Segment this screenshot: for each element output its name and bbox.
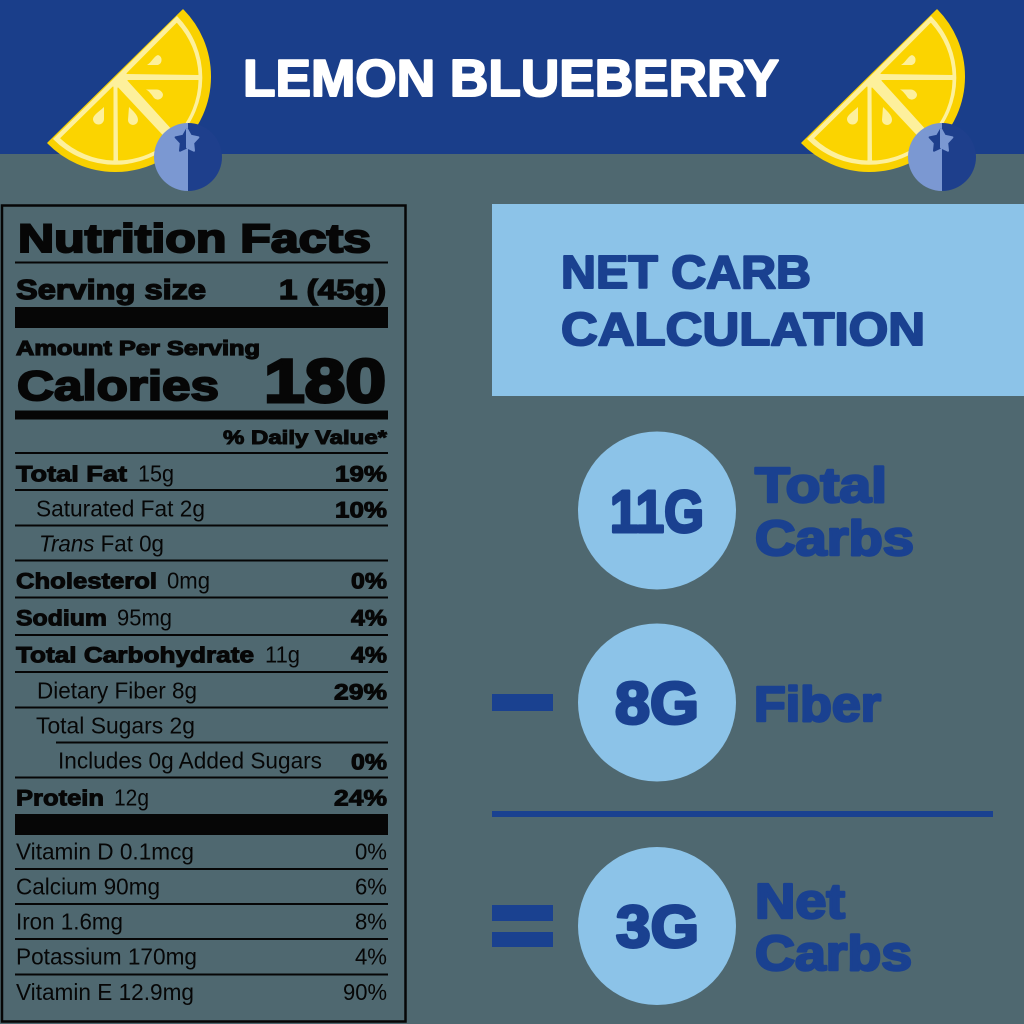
circle: total carbs value: 11G xyxy=(610,479,704,545)
title: LEMON BLUEBERRY xyxy=(243,50,779,108)
header band xyxy=(0,0,1024,154)
calories row: Calories xyxy=(17,362,219,409)
serving size row xyxy=(16,274,386,305)
row: saturated fat: 10% xyxy=(335,498,387,522)
row: dietary fiber: 29% xyxy=(334,680,387,704)
circle: total carbs value xyxy=(578,432,736,590)
circle: fiber value xyxy=(578,624,736,782)
row: calcium xyxy=(16,874,387,900)
row: total carbohydrate: 4% xyxy=(351,642,387,668)
row: iron xyxy=(16,908,387,934)
row: added sugars: Includes 0g Added Sugars xyxy=(58,748,322,774)
row: trans fat: Trans Fat 0g xyxy=(39,530,164,556)
row: vitamin d: 0% xyxy=(355,838,387,864)
sum line xyxy=(492,811,993,817)
row: cholesterol: 0% xyxy=(351,568,387,594)
amount per serving: Amount Per Serving xyxy=(16,337,260,360)
icon: lemon slice and blueberry, right xyxy=(802,10,976,191)
row: sodium xyxy=(16,604,387,630)
label: total carbs xyxy=(755,459,914,566)
serving size row: 1 (45g) xyxy=(279,274,386,305)
row: total fat: 19% xyxy=(335,462,387,486)
row: saturated fat: Saturated Fat 2g xyxy=(36,496,205,522)
row: iron: 8% xyxy=(355,908,387,934)
row: calcium: Calcium 90mg xyxy=(16,874,160,900)
row: total fat: 15g xyxy=(138,460,174,486)
row: total carbohydrate: 11g xyxy=(265,642,300,668)
calories row: 180 xyxy=(264,347,386,415)
row: sodium: Sodium xyxy=(16,606,107,630)
row: sodium: 95mg xyxy=(117,604,172,630)
row: potassium: Potassium 170mg xyxy=(16,944,197,970)
circle: net carbs value xyxy=(578,847,736,1005)
nutrition heading: Nutrition Facts xyxy=(18,217,371,261)
row: protein xyxy=(16,784,387,810)
row: total fat: Total Fat xyxy=(16,462,128,486)
icon: lemon slice and blueberry, left xyxy=(48,10,222,191)
row: cholesterol: 0mg xyxy=(167,568,210,594)
label: net carbs xyxy=(755,875,912,981)
label: total carbs: Total xyxy=(755,459,887,513)
row: dietary fiber xyxy=(37,678,387,704)
calories row xyxy=(17,347,386,415)
row: vitamin e xyxy=(16,979,387,1005)
row: cholesterol xyxy=(16,568,387,594)
panel: nutrition facts label xyxy=(2,206,406,1022)
row: added sugars: 0% xyxy=(351,750,387,774)
serving size row: Serving size xyxy=(16,274,206,305)
circle: fiber value: 8G xyxy=(615,670,699,736)
panel: net carb calculation heading xyxy=(492,204,1024,396)
row: vitamin e: Vitamin E 12.9mg xyxy=(16,979,194,1005)
row: vitamin d xyxy=(16,838,387,864)
panel: net carb calculation heading: CALCULATION xyxy=(561,303,925,355)
row: potassium xyxy=(16,944,387,970)
row: saturated fat xyxy=(36,496,387,522)
row: protein: Protein xyxy=(16,786,104,810)
row: calcium: 6% xyxy=(355,874,387,900)
row: total sugars: Total Sugars 2g xyxy=(36,712,195,738)
minus sign xyxy=(492,694,553,711)
panel: net carb calculation heading: NET CARB xyxy=(561,246,811,298)
row: cholesterol: Cholesterol xyxy=(16,568,157,594)
equals sign xyxy=(492,905,553,947)
label: fiber: Fiber xyxy=(754,678,881,732)
row: vitamin e: 90% xyxy=(343,979,387,1005)
row: sodium: 4% xyxy=(351,606,387,630)
row: potassium: 4% xyxy=(355,944,387,970)
label: net carbs: Net xyxy=(755,875,845,929)
row: dietary fiber: Dietary Fiber 8g xyxy=(37,678,197,704)
rules and bars xyxy=(15,262,388,976)
row: protein: 24% xyxy=(334,786,387,810)
row: total fat xyxy=(16,460,387,486)
row: total carbohydrate xyxy=(16,642,387,668)
circle: net carbs value: 3G xyxy=(616,894,699,960)
row: protein: 12g xyxy=(114,784,149,810)
row: vitamin d: Vitamin D 0.1mcg xyxy=(16,838,194,864)
label: total carbs: Carbs xyxy=(755,512,914,566)
row: iron: Iron 1.6mg xyxy=(16,908,123,934)
label: net carbs: Carbs xyxy=(755,927,912,981)
daily value header: % Daily Value* xyxy=(223,427,387,449)
row: total carbohydrate: Total Carbohydrate xyxy=(16,642,254,668)
